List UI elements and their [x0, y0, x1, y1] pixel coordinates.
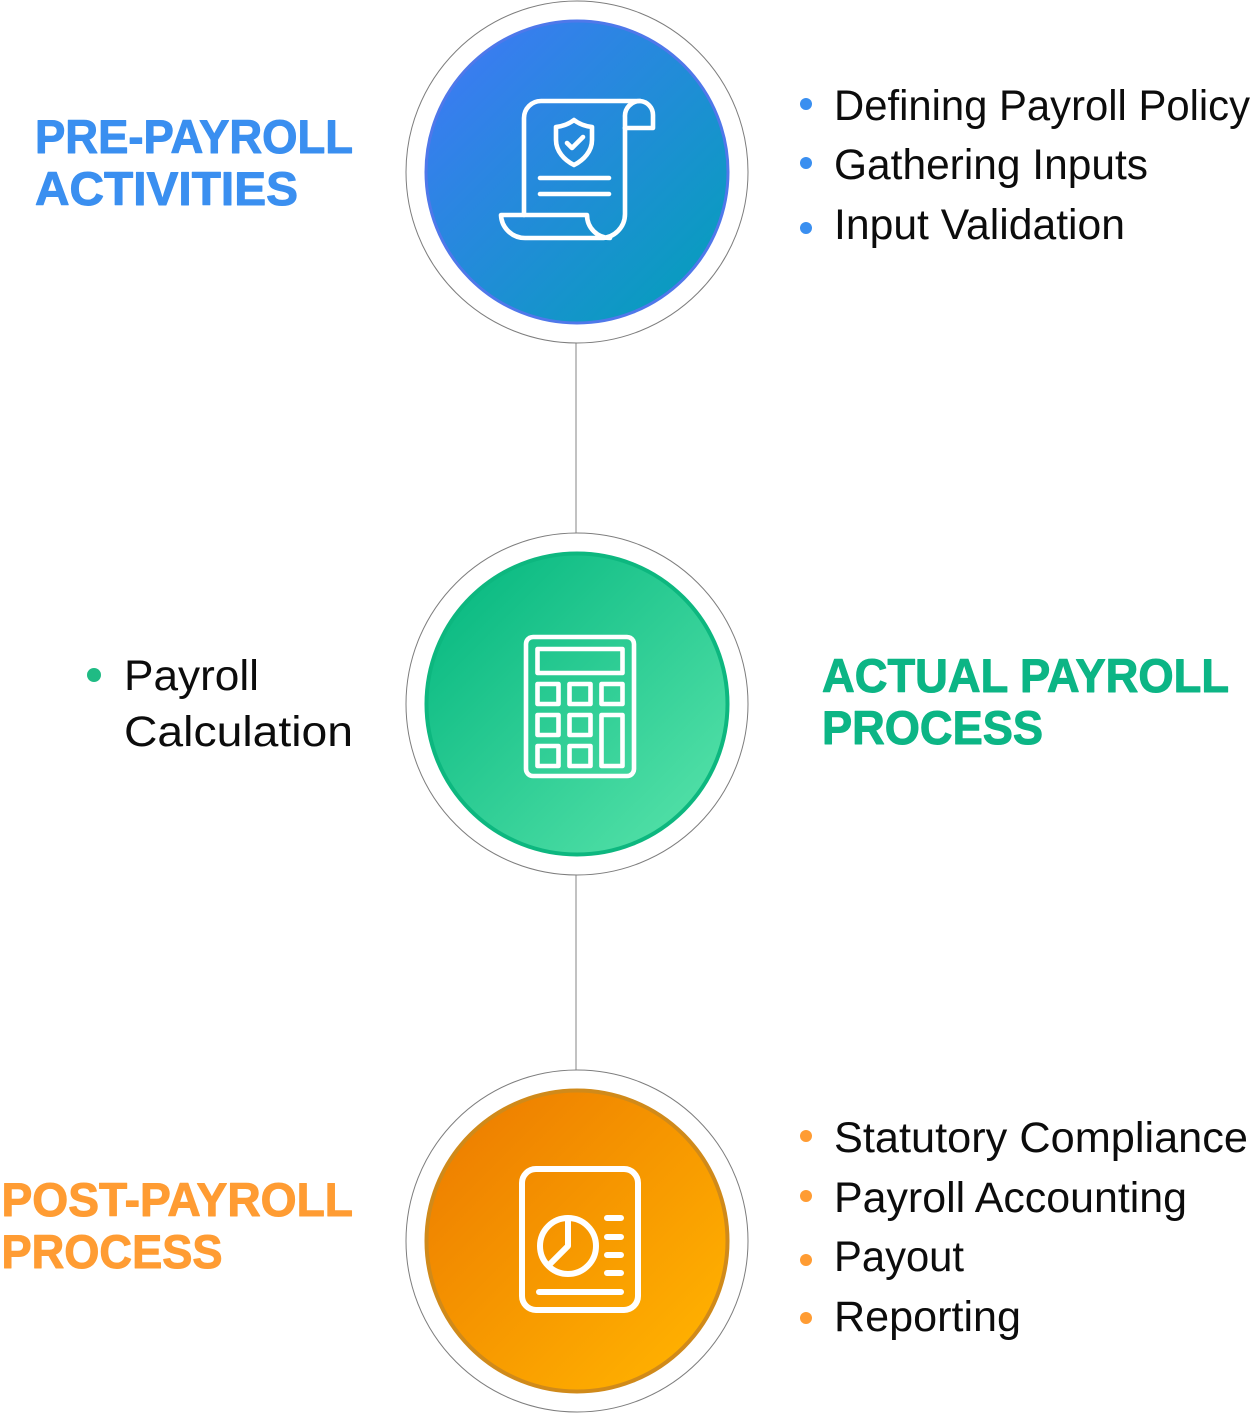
circle: pre-payroll stage: [406, 1, 748, 343]
bullet list: post-payroll items: Statutory Compliance: [834, 1114, 1248, 1162]
bullet list: pre-payroll items: Gathering Inputs: [834, 141, 1148, 189]
bullet list: post-payroll items: [800, 1114, 1248, 1341]
icon: scroll document with shield: [501, 101, 653, 238]
heading: pre-payroll activities: [35, 110, 353, 215]
bullet list: post-payroll items: Payroll Accounting: [834, 1174, 1187, 1222]
icon: report with pie chart: [522, 1169, 638, 1310]
heading: pre-payroll activities: ACTIVITIES: [35, 162, 298, 215]
icon: calculator: [526, 637, 634, 776]
circle: actual payroll stage: [406, 533, 748, 875]
bullet list: actual payroll items: Calculation: [124, 708, 353, 756]
heading: post-payroll process: POST-PAYROLL: [2, 1173, 353, 1226]
heading: actual payroll process: ACTUAL PAYROLL: [822, 649, 1229, 702]
heading: post-payroll process: [2, 1173, 353, 1278]
heading: actual payroll process: [822, 649, 1229, 754]
bullet list: pre-payroll items: Defining Payroll Policy: [834, 82, 1250, 130]
bullet list: actual payroll items: Payroll: [124, 652, 259, 700]
heading: pre-payroll activities: PRE-PAYROLL: [35, 110, 353, 163]
bullet list: post-payroll items: Payout: [834, 1233, 964, 1281]
bullet list: pre-payroll items: [800, 82, 1250, 249]
heading: actual payroll process: PROCESS: [822, 701, 1043, 754]
bullet list: pre-payroll items: Input Validation: [834, 201, 1125, 249]
heading: post-payroll process: PROCESS: [2, 1225, 222, 1278]
bullet list: post-payroll items: Reporting: [834, 1293, 1021, 1341]
bullet list: actual payroll items: [87, 652, 353, 756]
circle: post-payroll stage: [406, 1070, 748, 1412]
connector: stage 1 to stage 2: [575, 343, 577, 533]
connector: stage 2 to stage 3: [575, 875, 577, 1070]
